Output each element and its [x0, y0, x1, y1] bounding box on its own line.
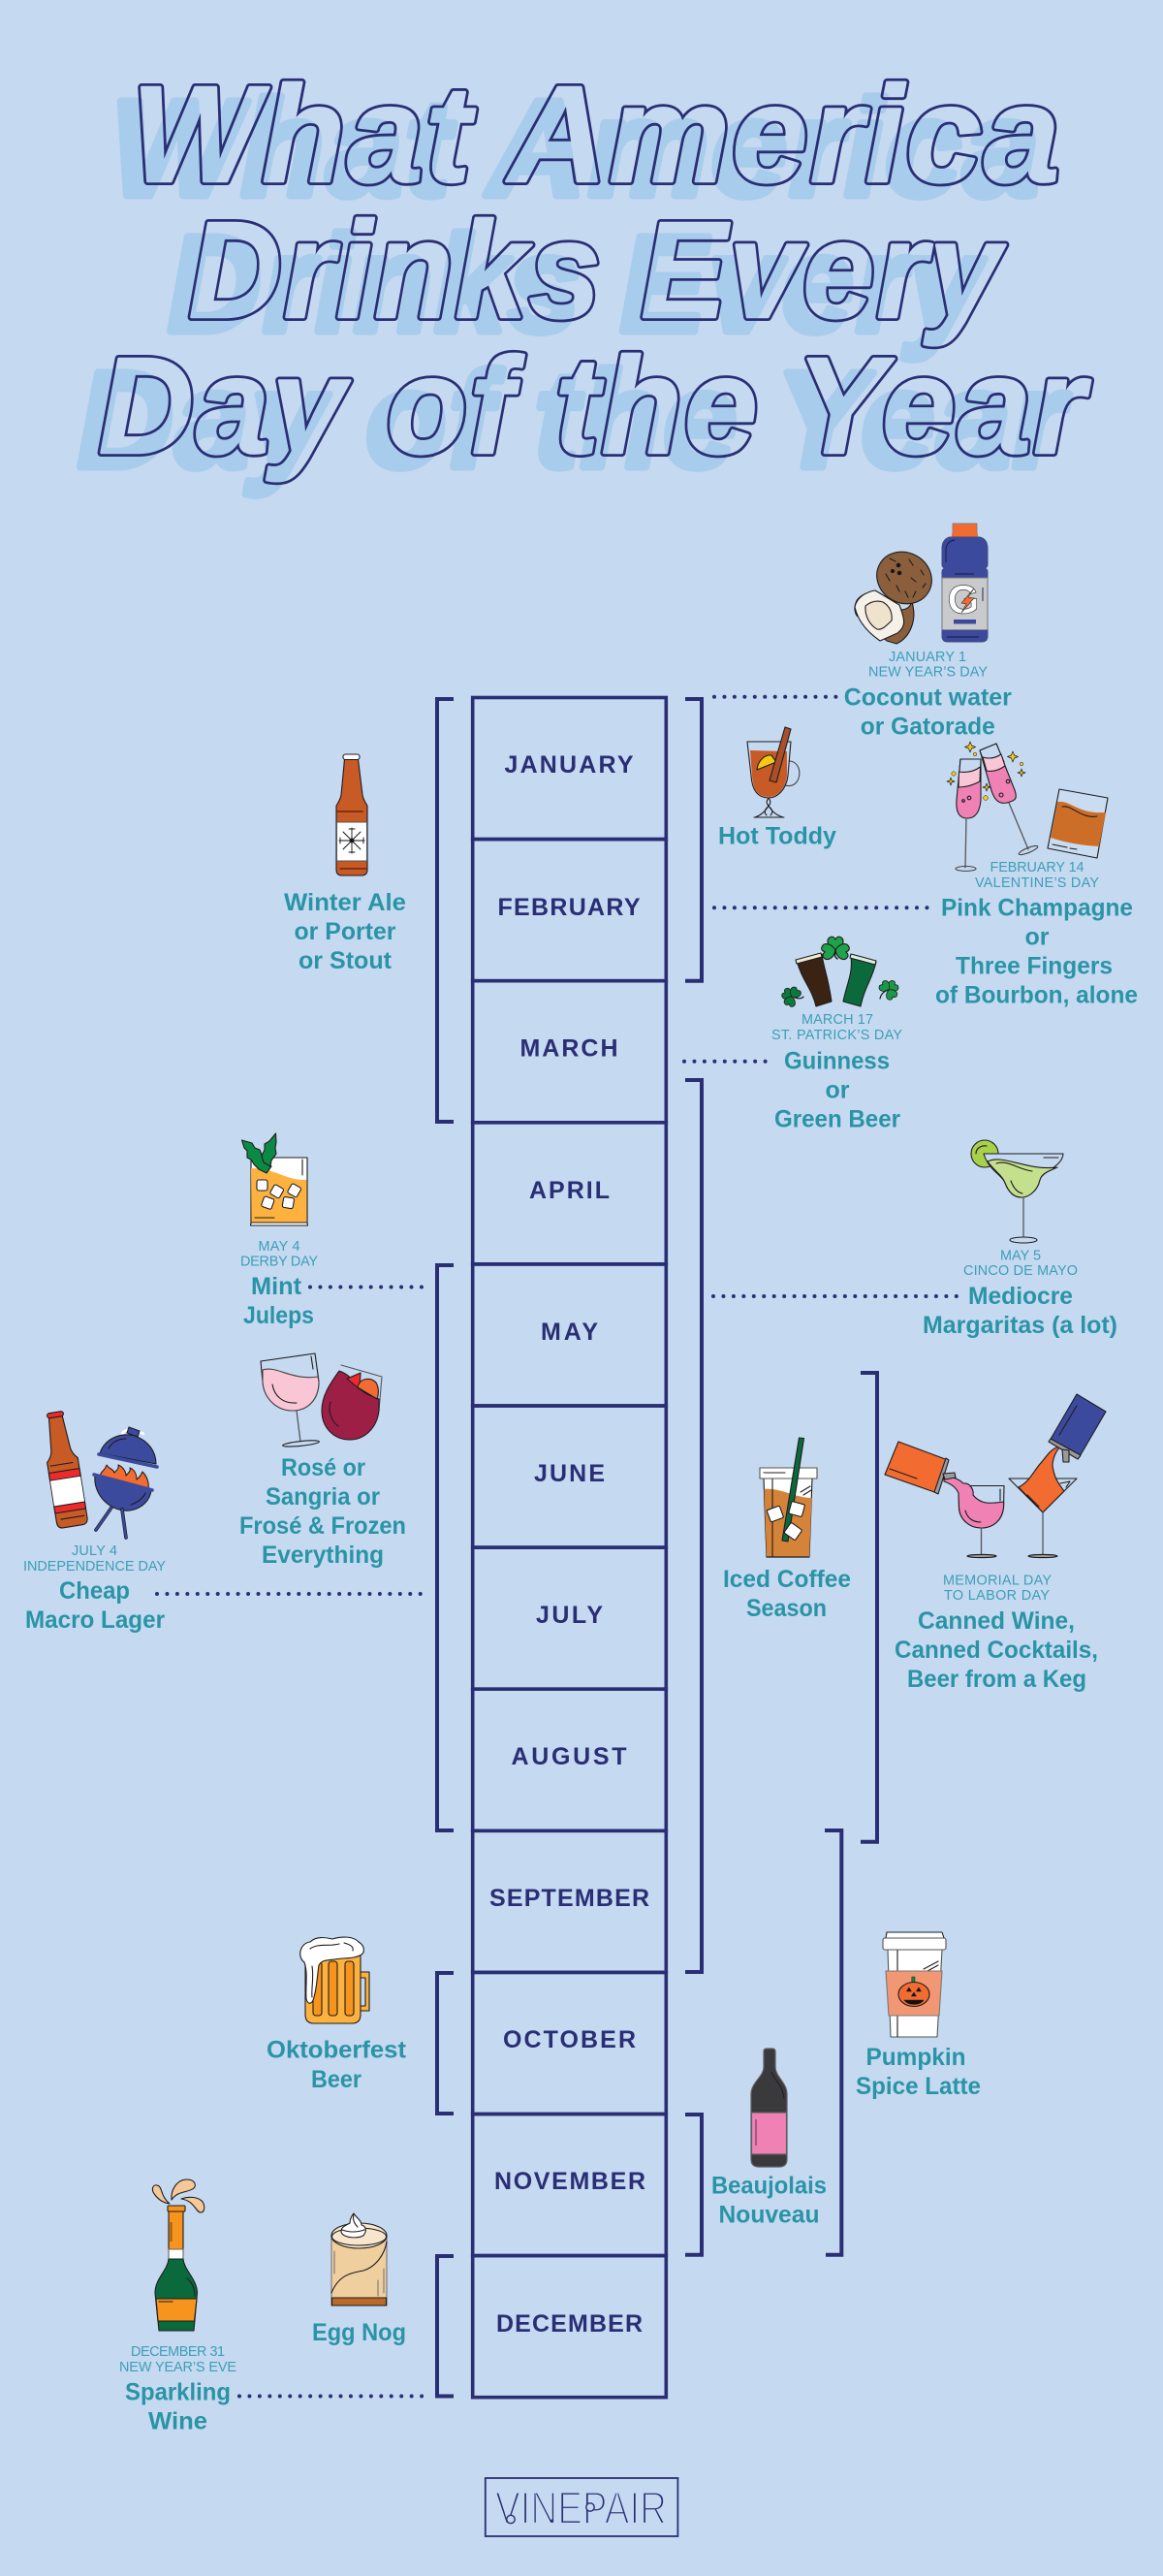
drink: canned wine, canned cocktails, keg — [895, 1607, 1098, 1693]
month: November — [473, 2114, 666, 2256]
drink: sparkling wine: Sparkling — [125, 2379, 231, 2406]
month: August: AUGUST — [512, 1743, 626, 1770]
drink: guinness or green beer — [774, 1047, 900, 1132]
bracket: Mar-Sep iced coffee — [685, 1080, 702, 1972]
drink: mediocre margaritas — [923, 1283, 1117, 1339]
icon: latte cup — [883, 1932, 946, 2037]
callout: beaujolais nouveau — [711, 2049, 827, 2228]
holiday: to labor day: TO LABOR DAY — [944, 1588, 1050, 1604]
icon: lager bottle — [40, 1410, 88, 1529]
drink: pumpkin spice latte — [856, 2044, 981, 2100]
callout: cheap macro lager — [23, 1410, 166, 1634]
drink: guinness or green beer: or — [826, 1076, 850, 1103]
drink: mediocre margaritas: Mediocre — [968, 1283, 1073, 1310]
drink: canned wine, canned cocktails, keg: Canned Wine, — [918, 1607, 1075, 1635]
callout: hot toddy — [718, 727, 836, 849]
date: july 4: JULY 4 — [72, 1543, 117, 1559]
title shadow: Drinks Every — [169, 207, 986, 361]
drink: rose sangria frose frozen everything: Frosé & Frozen — [239, 1512, 406, 1540]
callout: sparkling wine — [119, 2179, 236, 2435]
month: November: NOVEMBER — [494, 2168, 645, 2195]
month: May: MAY — [541, 1319, 598, 1346]
title outline: Day of the Year — [99, 329, 1091, 482]
callout: oktoberfest beer — [267, 1937, 407, 2093]
drink: rose sangria frose frozen everything: Sangria or — [266, 1483, 380, 1511]
month: January: JANUARY — [504, 751, 634, 779]
drink: pink champagne or three fingers of bourbon — [935, 894, 1138, 1008]
drink: rose sangria frose frozen everything: Rosé or — [281, 1454, 365, 1481]
drink: mediocre margaritas: Margaritas (a lot) — [923, 1312, 1117, 1339]
icon: rose glass — [261, 1353, 320, 1447]
callout: mediocre margaritas — [923, 1140, 1117, 1339]
icon: beers and clovers — [778, 937, 903, 1009]
callout: guinness or green beer — [771, 937, 903, 1132]
drink: beaujolais nouveau — [711, 2172, 827, 2228]
icon: mint julep glass — [242, 1133, 308, 1225]
icon: gatorade bottle: G — [948, 576, 979, 622]
icon: wine bottle — [751, 2049, 787, 2167]
month: June — [473, 1406, 666, 1547]
drink: guinness or green beer: Guinness — [784, 1047, 890, 1074]
drink: or gatorade: or Gatorade — [861, 714, 995, 741]
drink: beaujolais nouveau: Beaujolais — [711, 2172, 827, 2199]
title — [78, 57, 1091, 496]
dotted connectors — [157, 697, 958, 2397]
drink: pink champagne or three fingers of bourbon: Three Fingers — [956, 952, 1113, 979]
icon: champagne bottle — [152, 2179, 204, 2331]
connector: cinco de mayo — [713, 1294, 958, 1298]
bracket: egg nog — [437, 2256, 454, 2397]
icon: iced coffee cup — [760, 1438, 817, 1557]
drink: pink champagne or three fingers of bourbon: or — [1025, 923, 1050, 950]
bracket: pumpkin spice — [825, 1830, 841, 2255]
holiday: new year's day: NEW YEAR’S DAY — [868, 665, 988, 681]
drink: winter ale or porter or stout: or Stout — [299, 947, 393, 974]
icon: egg nog glass — [331, 2213, 387, 2306]
drink: cheap macro lager: Macro Lager — [25, 1606, 165, 1634]
holiday: st patrick's day: ST. PATRICK’S DAY — [771, 1028, 902, 1043]
callout: pumpkin spice latte — [856, 1932, 981, 2100]
month: July: JULY — [536, 1602, 603, 1629]
callout: canned wine, cocktails, keg — [885, 1394, 1106, 1693]
drink: canned wine, canned cocktails, keg: Beer from a Keg — [907, 1666, 1086, 1693]
date: february 14: FEBRUARY 14 — [990, 860, 1084, 875]
icon: grill — [94, 1427, 157, 1538]
month: December: DECEMBER — [496, 2310, 643, 2337]
icon: blue can pouring into martini — [1009, 1394, 1106, 1558]
month: December — [473, 2256, 666, 2398]
icon: orange can pouring into wine glass — [885, 1442, 1004, 1558]
drink: cheap macro lager: Cheap — [59, 1577, 130, 1605]
drink: winter ale or porter or stout: Winter Ale — [284, 889, 406, 916]
holiday: valentine's day: VALENTINE’S DAY — [975, 875, 1099, 891]
drink: guinness or green beer: Green Beer — [774, 1105, 900, 1132]
month: April: APRIL — [529, 1177, 610, 1204]
callout: rose sangria frozen — [239, 1353, 406, 1569]
drink: sparkling wine — [125, 2379, 231, 2435]
month: June: JUNE — [534, 1460, 605, 1487]
holiday: derby day: DERBY DAY — [240, 1255, 318, 1270]
drink: iced coffee season: Iced Coffee — [723, 1566, 851, 1593]
drink: cheap macro lager — [25, 1577, 165, 1634]
drink: mint juleps: Juleps — [243, 1302, 314, 1329]
connector: st patrick's day — [684, 1060, 773, 1064]
drink: mint juleps — [243, 1273, 314, 1329]
drink: winter ale or porter or stout: or Porter — [295, 918, 396, 945]
drink: pumpkin spice latte: Pumpkin — [866, 2044, 965, 2071]
date: may 4: MAY 4 — [258, 1239, 300, 1255]
icon: bourbon glass — [1048, 789, 1108, 858]
month: July — [473, 1547, 666, 1689]
title outline: What America — [132, 57, 1062, 210]
holiday: new year's eve: NEW YEAR’S EVE — [119, 2360, 236, 2375]
drink: rose sangria frose frozen everything — [239, 1454, 406, 1569]
connector: derby day — [310, 1286, 427, 1289]
month: October: OCTOBER — [503, 2026, 636, 2053]
callout: winter ale — [284, 754, 406, 974]
callout: mint juleps — [240, 1133, 318, 1329]
month: March: MARCH — [519, 1035, 618, 1063]
drink: iced coffee season — [723, 1566, 851, 1622]
holiday: cinco de mayo: CINCO DE MAYO — [963, 1263, 1078, 1279]
drink: oktoberfest beer — [267, 2036, 407, 2093]
callout: iced coffee season — [723, 1438, 851, 1622]
drink: sparkling wine: Wine — [148, 2408, 207, 2435]
icon: winter ale bottle — [336, 754, 367, 875]
icon: hot toddy mug — [747, 727, 800, 817]
brackets — [437, 699, 877, 2397]
connector: valentine's day — [714, 906, 928, 909]
month: May — [473, 1264, 666, 1406]
month: August — [473, 1689, 666, 1830]
date: december 31: DECEMBER 31 — [131, 2344, 225, 2360]
connector: new year's eve — [239, 2395, 427, 2399]
month: October — [473, 1972, 666, 2114]
drink: pink champagne or three fingers of bourbon: Pink Champagne — [941, 894, 1133, 921]
drink: coconut water: Coconut water — [844, 684, 1012, 712]
icon: beer mug — [300, 1937, 369, 2023]
holiday: independence day: INDEPENDENCE DAY — [23, 1559, 166, 1574]
logo: vinepair: VINEPAIR — [495, 2482, 667, 2533]
month: February: FEBRUARY — [498, 894, 641, 921]
drink: beaujolais nouveau: Nouveau — [719, 2201, 820, 2228]
drink: pink champagne or three fingers of bourbon: of Bourbon, alone — [935, 981, 1138, 1008]
connector: new year's day — [714, 695, 836, 699]
drink: iced coffee season: Season — [746, 1595, 827, 1622]
month: September — [473, 1830, 666, 1972]
drink: pumpkin spice latte: Spice Latte — [856, 2073, 981, 2100]
drink: rose sangria frose frozen everything: Everything — [262, 1542, 384, 1569]
date: may 5: MAY 5 — [1000, 1249, 1041, 1264]
drink: hot toddy: Hot Toddy — [718, 822, 836, 849]
month: March — [473, 981, 666, 1123]
date: January 1: JANUARY 1 — [889, 650, 966, 665]
bracket: Beaujolais — [685, 2115, 702, 2255]
title outline — [99, 57, 1091, 482]
icon: gatorade bottle — [942, 524, 988, 642]
title outline: Drinks Every — [189, 193, 1006, 346]
icon: coconut — [855, 542, 941, 644]
callout: pink champagne or bourbon — [935, 742, 1138, 1008]
bracket: May-Aug rose — [437, 1265, 454, 1830]
drink: canned wine, canned cocktails, keg: Canned Cocktails, — [895, 1637, 1098, 1664]
bracket: hot toddy Jan-Feb — [685, 699, 702, 981]
connector: independence day — [157, 1592, 427, 1596]
icon: champagne flutes — [947, 742, 1039, 871]
drink: oktoberfest beer: Oktoberfest — [267, 2036, 407, 2063]
title shadow: Day of the Year — [78, 343, 1070, 496]
drink: mint juleps: Mint — [251, 1273, 302, 1300]
drink: winter ale or porter or stout — [284, 889, 406, 974]
title shadow — [78, 72, 1070, 496]
callout: egg nog — [312, 2213, 406, 2346]
callout: coconut water or gatorade — [844, 524, 1012, 741]
month table — [473, 698, 666, 2398]
date: memorial day: MEMORIAL DAY — [943, 1573, 1052, 1588]
month: April — [473, 1123, 666, 1264]
drink: oktoberfest beer: Beer — [311, 2066, 361, 2093]
title shadow: What America — [110, 72, 1041, 225]
drink: egg nog: Egg Nog — [312, 2319, 406, 2346]
bracket: winter ale Jan-Mar — [437, 699, 454, 1122]
icon: sangria glass — [322, 1365, 382, 1440]
month: September: SEPTEMBER — [489, 1885, 649, 1912]
bracket: Oktoberfest — [437, 1973, 454, 2114]
month: January — [473, 698, 666, 840]
icon: margarita glass — [971, 1140, 1063, 1243]
date: march 17: MARCH 17 — [802, 1012, 873, 1028]
bracket: canned drinks — [861, 1373, 877, 1842]
month: February — [473, 840, 666, 981]
